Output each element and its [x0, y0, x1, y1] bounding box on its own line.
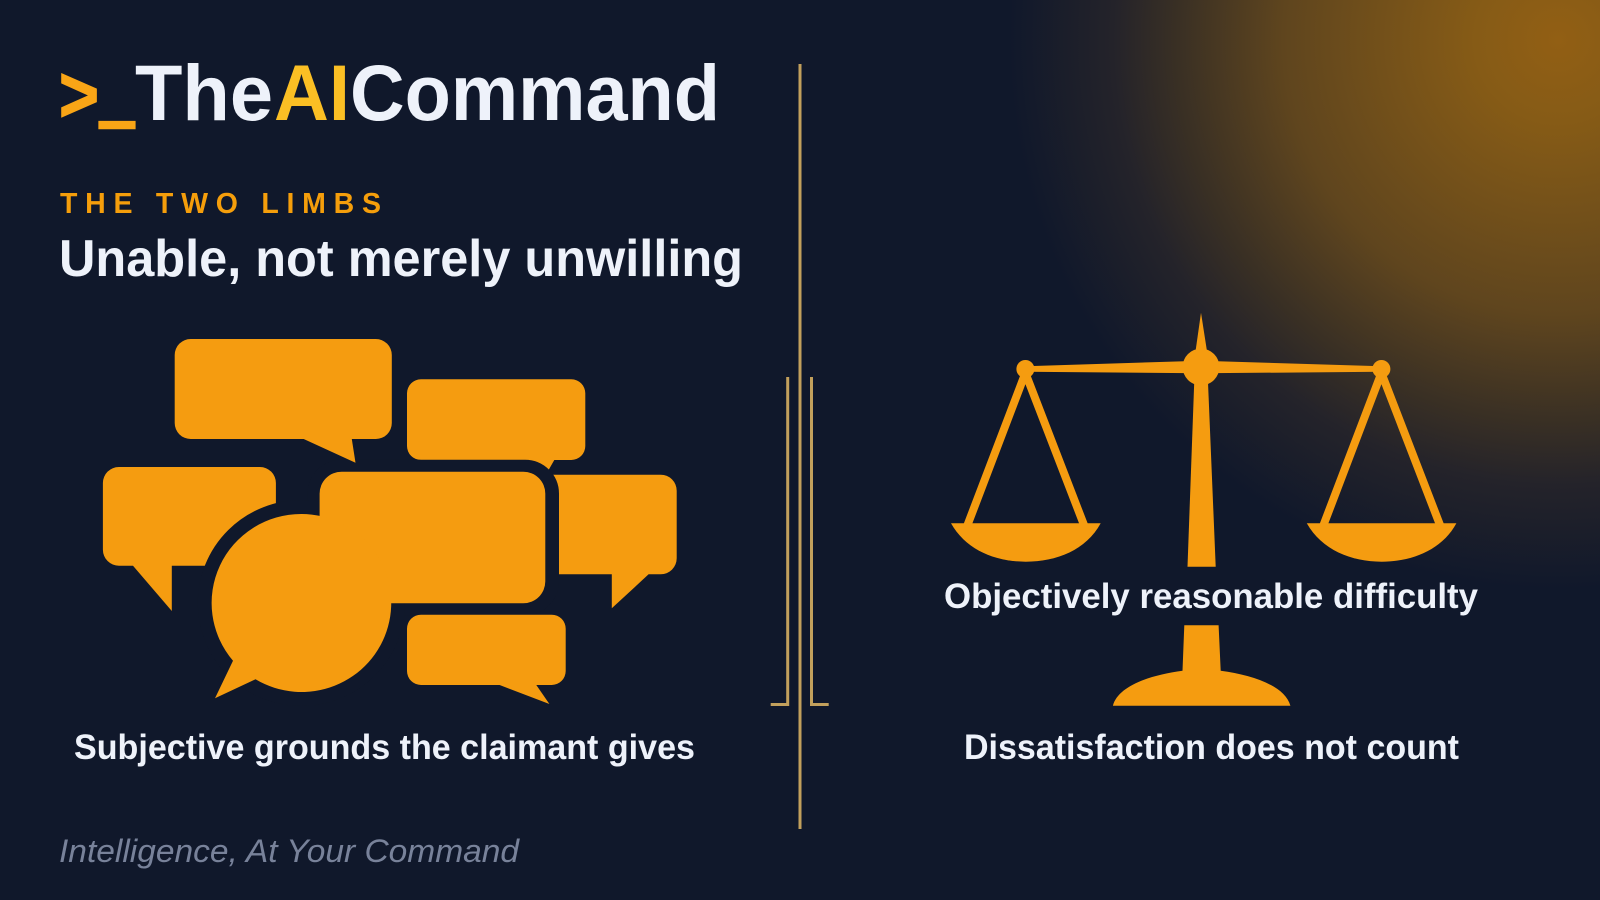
- logo word: Command: Command: [350, 48, 720, 137]
- bubble: lower right: [407, 615, 566, 704]
- bubble: left: [103, 467, 276, 611]
- bubble: front rectangle: [320, 472, 545, 603]
- bubble: right: [540, 475, 677, 608]
- central divider with pillar brackets: [771, 64, 829, 829]
- logo word: AI: AI: [274, 48, 350, 137]
- footer tagline: Intelligence, At Your Command: [59, 833, 520, 869]
- scale column: [1188, 380, 1216, 567]
- logo: TheAICommand: [59, 0, 720, 150]
- scale spike: [1196, 313, 1207, 350]
- icon: balance scales: [951, 313, 1456, 706]
- right caption: upper: Objectively reasonable difficulty: [944, 577, 1479, 616]
- bubble: top: [175, 339, 392, 463]
- bubble: top right: [407, 379, 585, 478]
- icon: speech bubbles: [103, 339, 677, 704]
- scale hub: [1183, 349, 1219, 385]
- scale right strings: [1324, 373, 1440, 525]
- logo prompt chevron: >: [59, 50, 99, 138]
- eyebrow label: THE TWO LIMBS: [60, 188, 381, 220]
- right caption: lower: Dissatisfaction does not count: [964, 728, 1459, 767]
- left caption: Subjective grounds the claimant gives: [74, 728, 695, 767]
- gap outline around front bubbles: [212, 472, 547, 692]
- scale base: [1113, 625, 1290, 706]
- scale left pan: [951, 523, 1101, 562]
- scale left strings: [968, 373, 1084, 525]
- scale pivot dots: [1016, 360, 1034, 378]
- heading: Unable, not merely unwilling: [59, 230, 743, 288]
- scale beam: [1025, 361, 1381, 373]
- bubble: front round with tail: [212, 514, 391, 698]
- logo word: The: The: [135, 48, 273, 137]
- scale right pan: [1307, 523, 1456, 562]
